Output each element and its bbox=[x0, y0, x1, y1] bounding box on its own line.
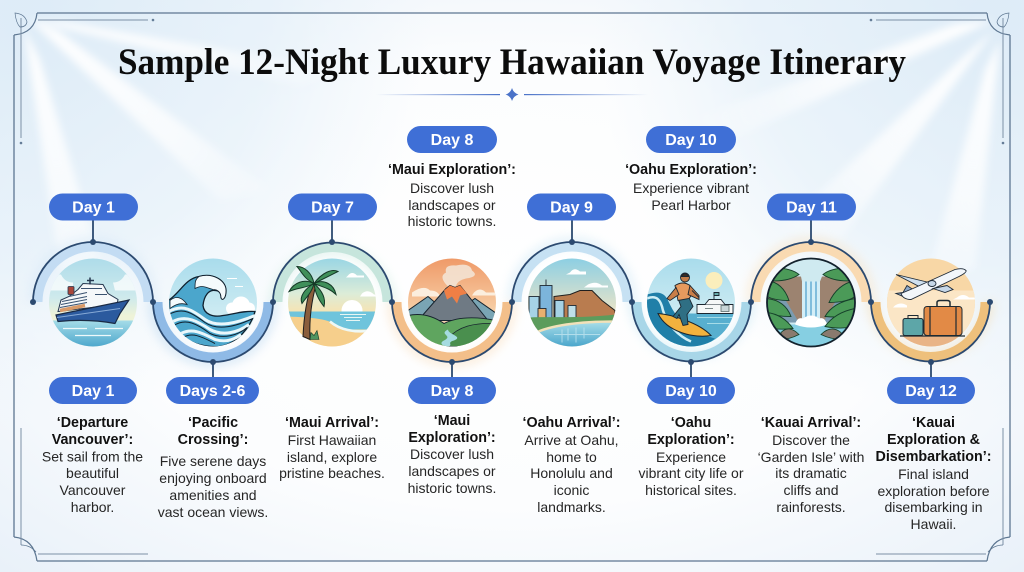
text: Kauai Arrival: Discover the bbox=[772, 432, 850, 448]
pill: Days 2-6 bbox=[166, 377, 259, 404]
pill: Day 8 bottom bbox=[408, 377, 496, 404]
text: upper Oahu Exploration: ‘Oahu Exploration’: bbox=[625, 162, 757, 178]
text: Pacific Crossing: vast ocean views. bbox=[158, 504, 268, 520]
text: lower Oahu Exploration: Exploration’: bbox=[647, 432, 735, 448]
text: Kauai Arrival: its dramatic bbox=[775, 465, 847, 481]
pill: Day 10 bottom bbox=[647, 377, 735, 404]
pill: Day 8 upper bbox=[407, 126, 497, 153]
text: upper Maui Exploration: Discover lush bbox=[410, 180, 494, 196]
pill: Day 7 top bbox=[288, 194, 377, 220]
text: upper Maui Exploration: ‘Maui Exploration’: bbox=[388, 162, 516, 178]
pill: Day 10 upper bbox=[646, 126, 736, 153]
text: upper Oahu Exploration: Experience vibrant bbox=[633, 180, 749, 196]
text: lower Oahu Exploration: historical sites. bbox=[645, 482, 737, 498]
pill: Day 1 top bbox=[49, 194, 138, 220]
text: Maui Arrival bbox=[279, 415, 385, 481]
text: Kauai Exploration and Disembarkation: disembarking in bbox=[884, 499, 983, 515]
pill: Day 7 top: Day 7 bbox=[311, 200, 354, 217]
text: Pacific Crossing: amenities and bbox=[169, 487, 257, 503]
icon: waterfall bbox=[767, 258, 855, 346]
text: Kauai Exploration and Disembarkation: Final island bbox=[898, 466, 969, 482]
text: Maui Arrival: island, explore bbox=[287, 449, 377, 465]
text: lower Maui Exploration: historic towns. bbox=[408, 480, 496, 496]
text: Kauai Exploration and Disembarkation: exploration before bbox=[877, 483, 990, 499]
text: Kauai Arrival: cliffs and bbox=[784, 482, 838, 498]
text: Departure Vancouver: Vancouver’: bbox=[52, 432, 133, 448]
pill: Day 12 bbox=[887, 377, 975, 404]
text: Departure Vancouver: beautiful bbox=[66, 465, 119, 481]
icon: palm beach bbox=[288, 258, 378, 346]
text: Maui Arrival: First Hawaiian bbox=[288, 432, 376, 448]
text: Pacific Crossing bbox=[158, 415, 268, 520]
text: lower Maui Exploration: Exploration’: bbox=[408, 430, 496, 446]
icon: cruise ship bbox=[49, 258, 137, 348]
text: Oahu Arrival: landmarks. bbox=[537, 499, 606, 515]
text: Departure Vancouver: Vancouver bbox=[60, 482, 126, 498]
pill: Day 12: Day 12 bbox=[905, 383, 957, 400]
text: Departure Vancouver bbox=[42, 415, 143, 515]
text: Pacific Crossing: ‘Pacific bbox=[188, 415, 238, 431]
text: Kauai Exploration and Disembarkation: ‘Kauai bbox=[912, 415, 955, 431]
text: Kauai Exploration and Disembarkation: Exploration & bbox=[887, 432, 980, 448]
text: lower Oahu Exploration: vibrant city life or bbox=[638, 465, 744, 481]
text: Departure Vancouver: Set sail from the bbox=[42, 448, 143, 464]
icon: surfer bbox=[647, 258, 735, 348]
text: Departure Vancouver: harbor. bbox=[71, 499, 114, 515]
pill: Day 8 upper: Day 8 bbox=[431, 132, 473, 149]
text: Kauai Arrival: ‘Garden Isle’ with bbox=[758, 449, 864, 465]
pill: Day 11 top: Day 11 bbox=[786, 200, 837, 217]
text: Pacific Crossing: Five serene days bbox=[160, 453, 266, 469]
text: Pacific Crossing: enjoying onboard bbox=[159, 470, 267, 486]
text: upper Maui Exploration: landscapes or bbox=[408, 197, 496, 213]
text: Kauai Arrival: rainforests. bbox=[776, 499, 846, 515]
timeline arcs bbox=[30, 220, 993, 377]
title divider with diamond bbox=[376, 88, 648, 101]
text: Oahu Arrival: iconic bbox=[554, 482, 589, 498]
icon: plane and suitcases bbox=[887, 258, 975, 348]
text: Oahu Arrival: home to bbox=[546, 449, 597, 465]
text: Kauai Exploration and Disembarkation: Hawaii. bbox=[911, 516, 956, 532]
text: upper Maui Exploration bbox=[388, 162, 516, 229]
text: Oahu Arrival: Honolulu and bbox=[530, 465, 613, 481]
pill: Day 9 top bbox=[527, 194, 616, 220]
text: lower Maui Exploration: landscapes or bbox=[408, 463, 496, 479]
icon: Honolulu city bbox=[528, 258, 616, 346]
pill: Day 1 top: Day 1 bbox=[72, 200, 115, 217]
pill: Day 9 top: Day 9 bbox=[550, 200, 593, 217]
title: Sample 12-Night Luxury Hawaiian Voyage Itinerary bbox=[118, 42, 906, 83]
pill: Day 10 bottom: Day 10 bbox=[665, 383, 717, 400]
icon: ocean wave bbox=[168, 258, 257, 347]
text: Kauai Arrival bbox=[758, 415, 864, 515]
text: upper Maui Exploration: historic towns. bbox=[408, 213, 496, 229]
pill: Day 1 bottom: Day 1 bbox=[72, 383, 114, 400]
text: Kauai Arrival: ‘Kauai Arrival’: bbox=[761, 415, 861, 431]
text: lower Oahu Exploration: ‘Oahu bbox=[671, 415, 711, 431]
text: Kauai Exploration and Disembarkation: Disembarkation’: bbox=[876, 449, 992, 465]
pill: Day 1 bottom bbox=[49, 377, 137, 404]
text: upper Oahu Exploration bbox=[625, 162, 757, 213]
text: upper Oahu Exploration: Pearl Harbor bbox=[651, 197, 731, 213]
icon: volcano bbox=[408, 258, 498, 346]
text: Oahu Arrival: Arrive at Oahu, bbox=[524, 432, 619, 448]
text: lower Oahu Exploration: Experience bbox=[656, 449, 726, 465]
text: Pacific Crossing: Crossing’: bbox=[178, 432, 248, 448]
pill: Day 11 top bbox=[767, 194, 856, 220]
text: Oahu Arrival: ‘Oahu Arrival’: bbox=[523, 415, 620, 431]
text: lower Maui Exploration: ‘Maui bbox=[434, 413, 470, 429]
text: Oahu Arrival bbox=[523, 415, 620, 515]
text: lower Maui Exploration: Discover lush bbox=[410, 446, 494, 462]
text: lower Maui Exploration bbox=[408, 413, 496, 496]
pill: Day 10 upper: Day 10 bbox=[665, 132, 717, 149]
text: Maui Arrival: pristine beaches. bbox=[279, 465, 385, 481]
pill: Day 8 bottom: Day 8 bbox=[431, 383, 473, 400]
text: Maui Arrival: ‘Maui Arrival’: bbox=[285, 415, 379, 431]
pill: Days 2-6: Days 2-6 bbox=[180, 383, 246, 400]
text: lower Oahu Exploration bbox=[638, 415, 744, 498]
text: Departure Vancouver: ‘Departure bbox=[57, 415, 128, 431]
text: Kauai Exploration and Disembarkation bbox=[876, 415, 992, 532]
